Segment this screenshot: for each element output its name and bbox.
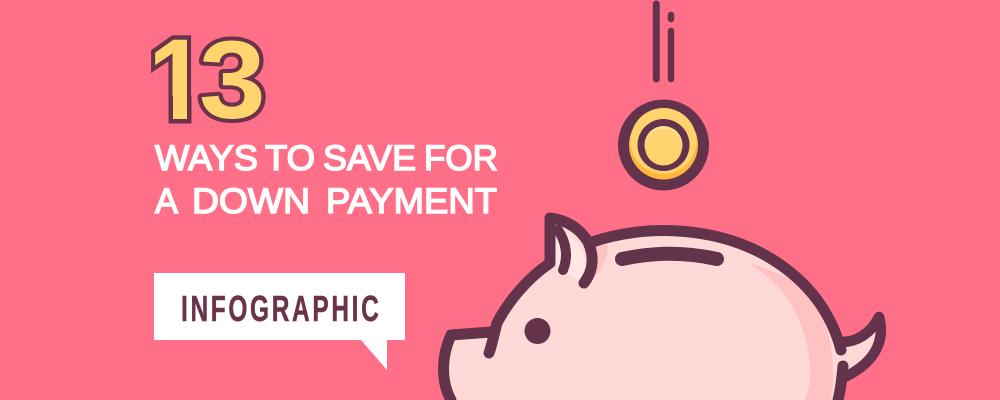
heading: PAYMENT	[326, 182, 497, 221]
pig eye	[524, 318, 550, 344]
heading: TO	[265, 139, 315, 178]
speech bubble: infographic label	[154, 273, 405, 370]
pig body fill	[445, 218, 843, 400]
icon: piggy bank	[443, 218, 881, 400]
heading	[155, 139, 498, 221]
pig outline	[443, 218, 843, 400]
pig tail	[835, 317, 881, 380]
pig ear highlight	[553, 226, 586, 283]
heading: A	[155, 182, 179, 221]
speech bubble: infographic label: INFOGRAPHIC	[181, 288, 381, 329]
heading: WAYS	[155, 139, 258, 178]
falling motion lines	[656, 4, 671, 79]
heading: DOWN	[192, 182, 310, 221]
number: 13: 3	[199, 20, 266, 142]
pig body shading	[589, 242, 833, 400]
heading: SAVE	[323, 139, 416, 178]
number: 13: 1	[148, 16, 206, 144]
number: 13	[140, 16, 266, 144]
pig inner ear line	[558, 230, 566, 270]
pig coin slot	[622, 254, 717, 259]
icon: coin	[618, 100, 709, 190]
heading: FOR	[424, 139, 498, 178]
